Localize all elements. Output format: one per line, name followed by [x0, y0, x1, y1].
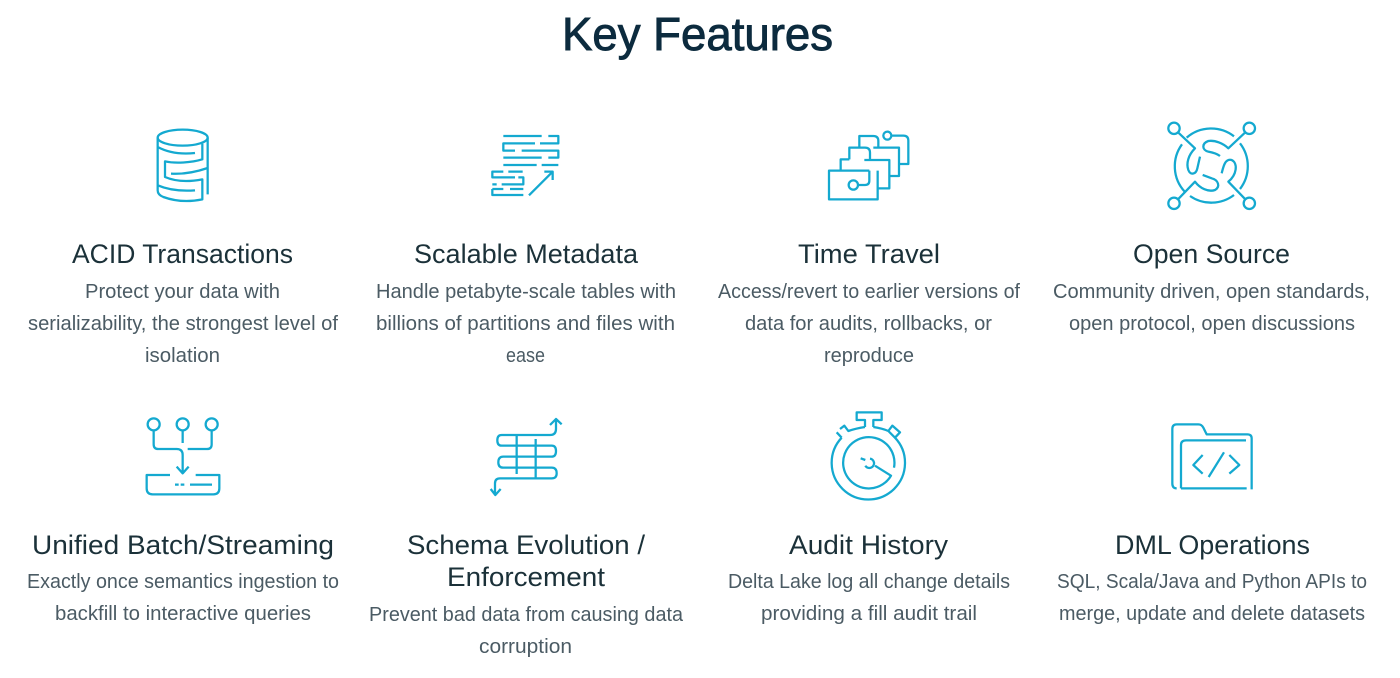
icon: database cylinder [158, 130, 208, 201]
description: Prevent bad data from causing data [369, 604, 684, 626]
description: Delta Lake log all change details [728, 571, 1010, 593]
description: data for audits, rollbacks, or [745, 313, 992, 335]
heading: DML Operations [1115, 530, 1310, 560]
description: merge, update and delete datasets [1059, 603, 1365, 625]
icon: three sources flowing into tray [147, 418, 219, 494]
description: backfill to interactive queries [55, 603, 311, 625]
panel: Unified Batch/Streaming [27, 418, 339, 625]
description [718, 281, 1020, 367]
description [28, 281, 338, 367]
icon: stopwatch [832, 412, 905, 499]
description: isolation [145, 345, 220, 367]
title: Key Features [562, 8, 833, 60]
description: corruption [479, 636, 572, 658]
heading [407, 530, 646, 592]
icon: stacked file versions [829, 132, 908, 199]
heading: Enforcement [447, 562, 606, 592]
panel: Audit History [728, 412, 1010, 625]
description: Handle petabyte-scale tables with [376, 281, 676, 303]
description: SQL, Scala/Java and Python APIs to [1057, 571, 1367, 593]
heading: Unified Batch/Streaming [32, 530, 334, 560]
heading: Schema Evolution / [407, 530, 646, 560]
icon: metadata blocks with arrow [492, 136, 558, 195]
panel: Schema Evolution / Enforcement [369, 419, 684, 658]
description [376, 281, 676, 367]
description: billions of partitions and files with [376, 313, 675, 335]
heading: Audit History [789, 530, 949, 560]
icon: open source network ring [1168, 123, 1255, 209]
panel: Time Travel [718, 132, 1020, 367]
description [369, 604, 684, 658]
icon: code folder [1172, 424, 1252, 489]
description: Protect your data with [85, 281, 280, 303]
heading: Open Source [1133, 239, 1290, 269]
description: Access/revert to earlier versions of [718, 281, 1020, 303]
description [27, 571, 339, 625]
heading: Time Travel [798, 239, 940, 269]
description: reproduce [824, 345, 914, 367]
panel: DML Operations [1057, 424, 1367, 625]
description: providing a fill audit trail [761, 603, 977, 625]
description [1053, 281, 1370, 335]
description [1057, 571, 1367, 625]
description: serializability, the strongest level of [28, 313, 338, 335]
description: Exactly once semantics ingestion to [27, 571, 339, 593]
description [728, 571, 1010, 625]
description: Community driven, open standards, [1053, 281, 1370, 303]
icon: winding table grid [491, 419, 562, 495]
description: ease [506, 345, 545, 367]
panel: ACID Transactions [28, 130, 338, 367]
panel: Scalable Metadata [376, 136, 676, 367]
heading: Scalable Metadata [414, 239, 639, 269]
heading: ACID Transactions [72, 239, 293, 269]
description: open protocol, open discussions [1069, 313, 1355, 335]
panel: Open Source [1053, 123, 1370, 335]
